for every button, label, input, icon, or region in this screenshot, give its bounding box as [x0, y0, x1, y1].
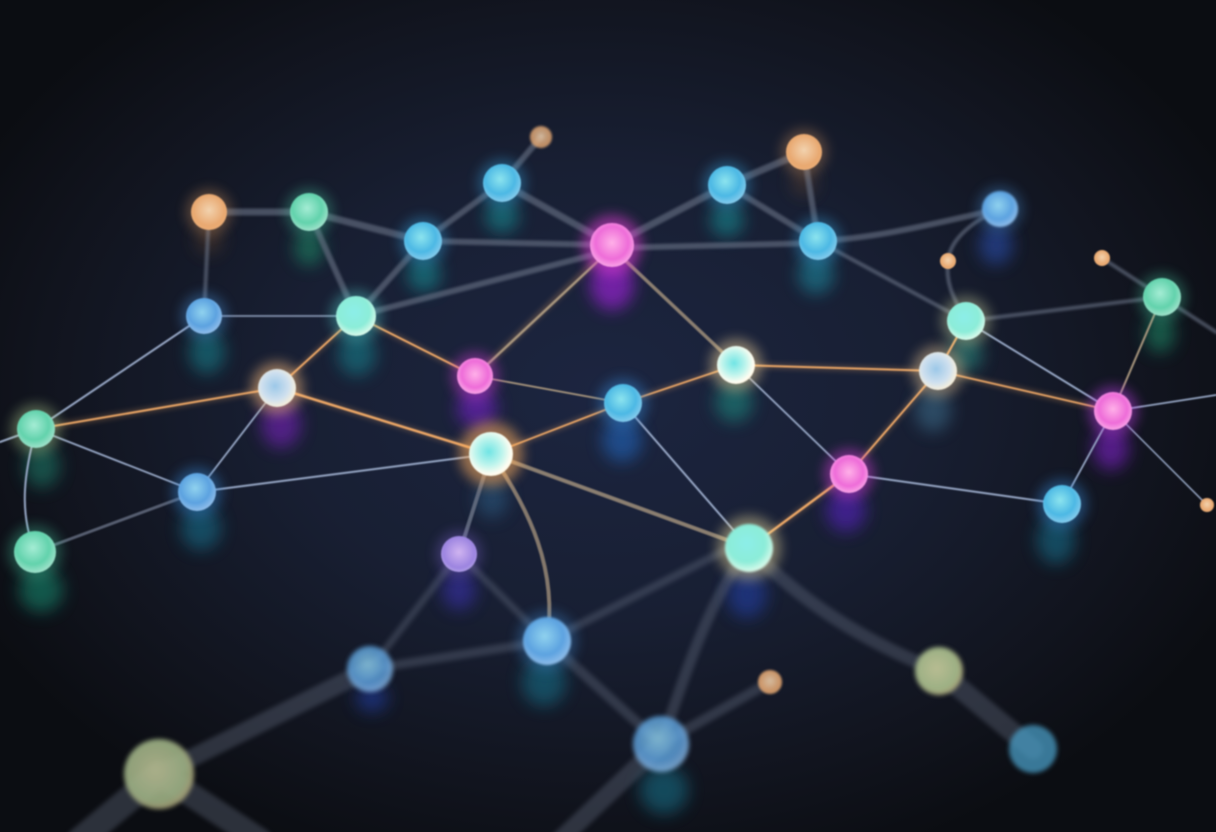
node: blue 1062,504 [1037, 479, 1087, 529]
node: magenta hub 612,245 [582, 215, 642, 275]
node: magenta 475,376 [451, 352, 499, 400]
node: bright hub 491,454 [459, 422, 523, 486]
node: blue 1000,209 [977, 186, 1023, 232]
node: orange small 948,261 [940, 253, 956, 269]
node: large blurred olive 159,774 [124, 739, 194, 809]
node: blue 547,641 [517, 611, 577, 671]
node: sky 727,185 [703, 161, 751, 209]
node: white 736,365 [710, 339, 762, 391]
node: peach 209,212 [186, 189, 232, 235]
node: blurred orange 770,682 [758, 670, 782, 694]
node: blurred blue 370,669 [347, 646, 393, 692]
node: pale 938,371 [912, 345, 964, 397]
node: magenta 849,474 [824, 449, 874, 499]
node: teal 356,316 [330, 290, 382, 342]
node: teal 623,403 [598, 378, 648, 428]
node: green 1162,297 [1138, 273, 1186, 321]
node: purple 459,554 [436, 531, 482, 577]
node: sky 423,241 [399, 217, 447, 265]
node: green 36,429 [11, 404, 61, 454]
node: magenta 1113,411 [1088, 386, 1138, 436]
node: white 277,388 [251, 362, 303, 414]
node: blurred olive 939,671 [915, 647, 963, 695]
node: orange small top [530, 126, 552, 148]
node: blue 204,316 [181, 293, 227, 339]
node: green 35,552 [8, 525, 62, 579]
wide blurred links [204, 137, 1216, 332]
node: sky 502,183 [478, 159, 526, 207]
node: blue 197,492 [172, 467, 222, 517]
node: blurred blue 661,744 [633, 716, 689, 772]
node: green 309,212 [285, 188, 333, 236]
node: green-white 966,321 [941, 296, 991, 346]
node: blurred blue 1033,749 [1009, 725, 1057, 773]
node: orange 804,152 [781, 129, 827, 175]
node: orange small 1102,258 [1094, 250, 1110, 266]
thin glowing links [36, 245, 1113, 548]
reflections beneath nodes [19, 168, 1175, 814]
node: orange small right [1200, 498, 1214, 512]
node: bright green hub 749,548 [717, 516, 781, 580]
node: sky 818,241 [794, 217, 842, 265]
